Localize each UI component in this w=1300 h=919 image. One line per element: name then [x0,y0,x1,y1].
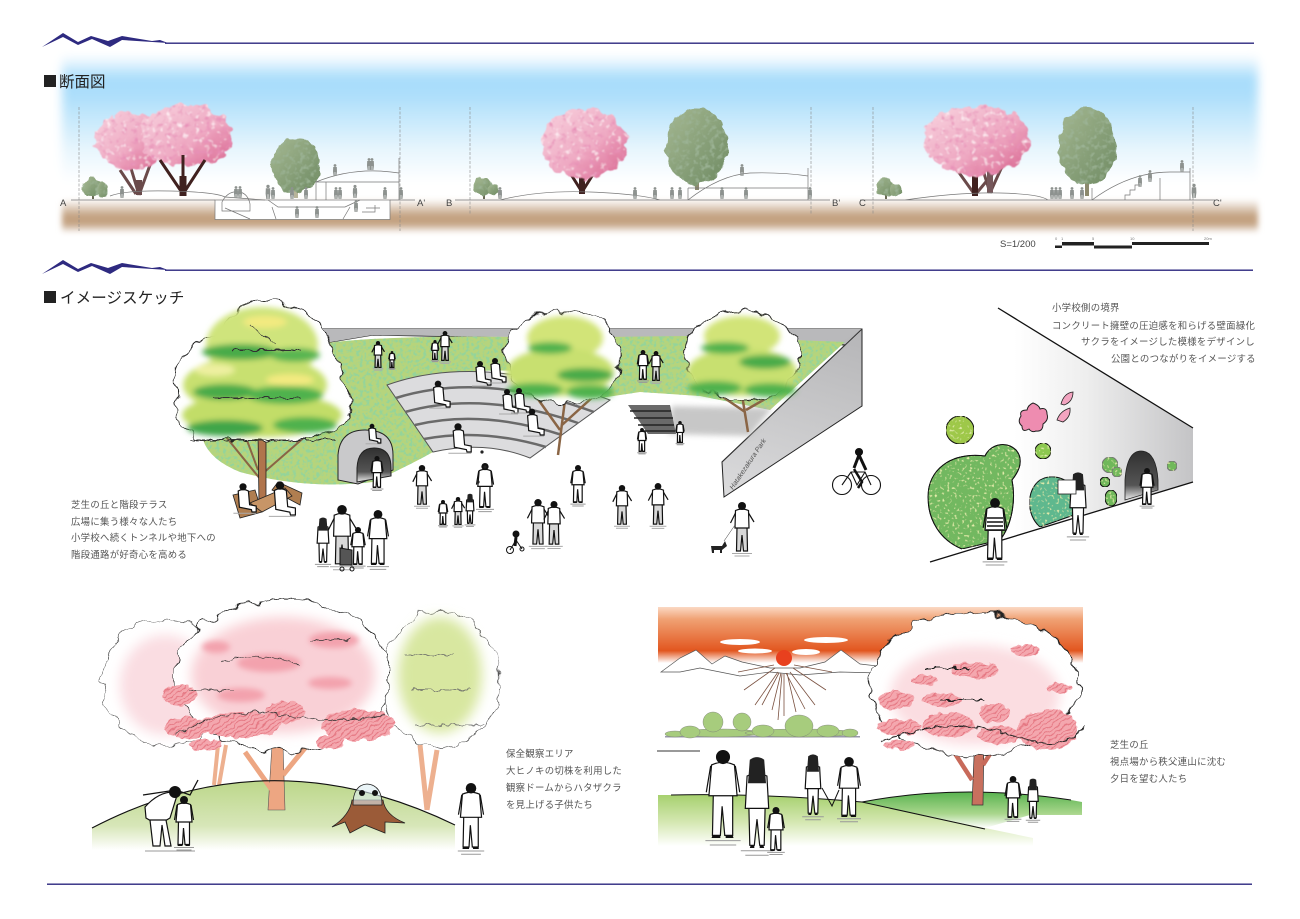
section A tree group [83,105,320,199]
panel: cross sections [60,55,1258,250]
text: plaza caption: 小学校へ続くトンネルや地下への [71,532,216,543]
tree right [380,612,500,810]
text: plaza caption: 広場に集う様々な人たち [71,516,177,527]
scale bar: S=1/200 [1000,239,1036,250]
plaza tree right [684,311,800,432]
stepped terrace [387,372,610,458]
section B structure lines [455,168,830,200]
scale bar: 1 [1061,236,1064,241]
section labels: A [60,198,67,209]
plaza people [233,331,754,570]
plaza tree centre [505,310,621,455]
text: conservation caption: 観察ドームからハタザクラ [506,782,622,793]
pointing adult [143,780,198,851]
sky band [62,55,1258,205]
sunset people [705,750,1040,855]
underground stairs and shadow [628,405,772,436]
lawn right [515,336,845,410]
sun rays [738,665,832,720]
section labels: C' [1213,198,1222,209]
section C trees [876,105,1116,199]
mountains [661,650,895,676]
section A people [120,158,403,218]
text: plaza caption [71,499,216,560]
section labels [60,198,1222,209]
text: conservation caption: 大ヒノキの切株を利用した [506,765,622,776]
panel: conservation sketch [92,599,500,854]
section labels: B [446,198,452,209]
text: sunset caption [1110,739,1226,784]
soil band [62,199,1258,233]
scale bar [1000,236,1212,250]
text: wall caption: サクラをイメージした模様をデザインし [1081,336,1255,347]
scale bar: 5 [1092,236,1095,241]
section C structure lines [860,168,1215,200]
header rule middle [42,260,1253,274]
scale bar: 10 [1130,236,1135,241]
cherry flower [1019,403,1048,432]
foreground lawn [658,795,1033,846]
text: sunset caption: 視点場から秩父連山に沈む [1110,756,1226,767]
footer rule [47,884,1252,885]
heading: image sketch: イメージスケッチ [60,289,184,307]
wall tunnel [1125,451,1158,500]
far lawn hill [862,792,1082,828]
scale bar: 0 [1055,236,1058,241]
tricycle child [506,531,524,554]
text: plaza caption: 芝生の丘と階段テラス [71,499,168,510]
petals [1057,392,1073,422]
hill [92,781,455,850]
panel: sunset sketch [657,607,1085,855]
text: wall caption [1052,302,1256,364]
section dash lines [79,107,1193,231]
tunnel [338,430,393,484]
text: sunset caption: 芝生の丘 [1110,739,1149,750]
bench [233,482,302,518]
distant trees [657,712,860,751]
heading: section: 断面図 [59,73,106,91]
plaza tree left [176,300,352,505]
wall face [930,308,1193,562]
section labels: A' [417,198,425,209]
moss shapes [928,416,1177,549]
retaining wall [313,329,862,497]
text: conservation caption [506,748,622,810]
child and observer [174,783,484,854]
wall people [983,468,1154,565]
section labels: B' [832,198,840,209]
wall outlines [930,308,1193,562]
section A structure lines [71,158,415,220]
lawn left [203,337,530,484]
text: conservation caption: 保全観察エリア [506,748,574,759]
sunset sky [658,607,1083,663]
lawn lines [671,792,1071,829]
text: sunset caption: 夕日を望む人たち [1110,773,1187,784]
back tree left [103,618,227,785]
scale bar: 20m [1204,236,1212,241]
text: wall caption: 公園とのつながりをイメージする [1111,353,1256,364]
observation dome on stump [332,784,405,833]
text: conservation caption: を見上げる子供たち [506,799,593,810]
panel: plaza sketch [176,300,881,571]
dog [711,525,735,553]
stroller [340,548,354,571]
text: wall caption: コンクリート擁壁の圧迫感を和らげる壁面緑化 [1052,320,1256,331]
tree main [163,599,394,810]
sun [776,650,792,666]
text: plaza caption: 階段通路が好奇心を高める [71,549,187,560]
text: wall caption: 小学校側の境界 [1052,302,1120,313]
sign: Hatakezakura Park [729,437,768,491]
section B people [498,164,812,199]
hill outline [92,781,455,828]
section B trees [474,108,728,199]
clouds [720,637,848,655]
section C people [1050,160,1196,199]
section labels: C [859,198,866,209]
header rule top [42,33,1254,47]
panel: school wall sketch [928,308,1193,565]
cyclist [832,448,880,494]
cherry tree [869,612,1085,805]
